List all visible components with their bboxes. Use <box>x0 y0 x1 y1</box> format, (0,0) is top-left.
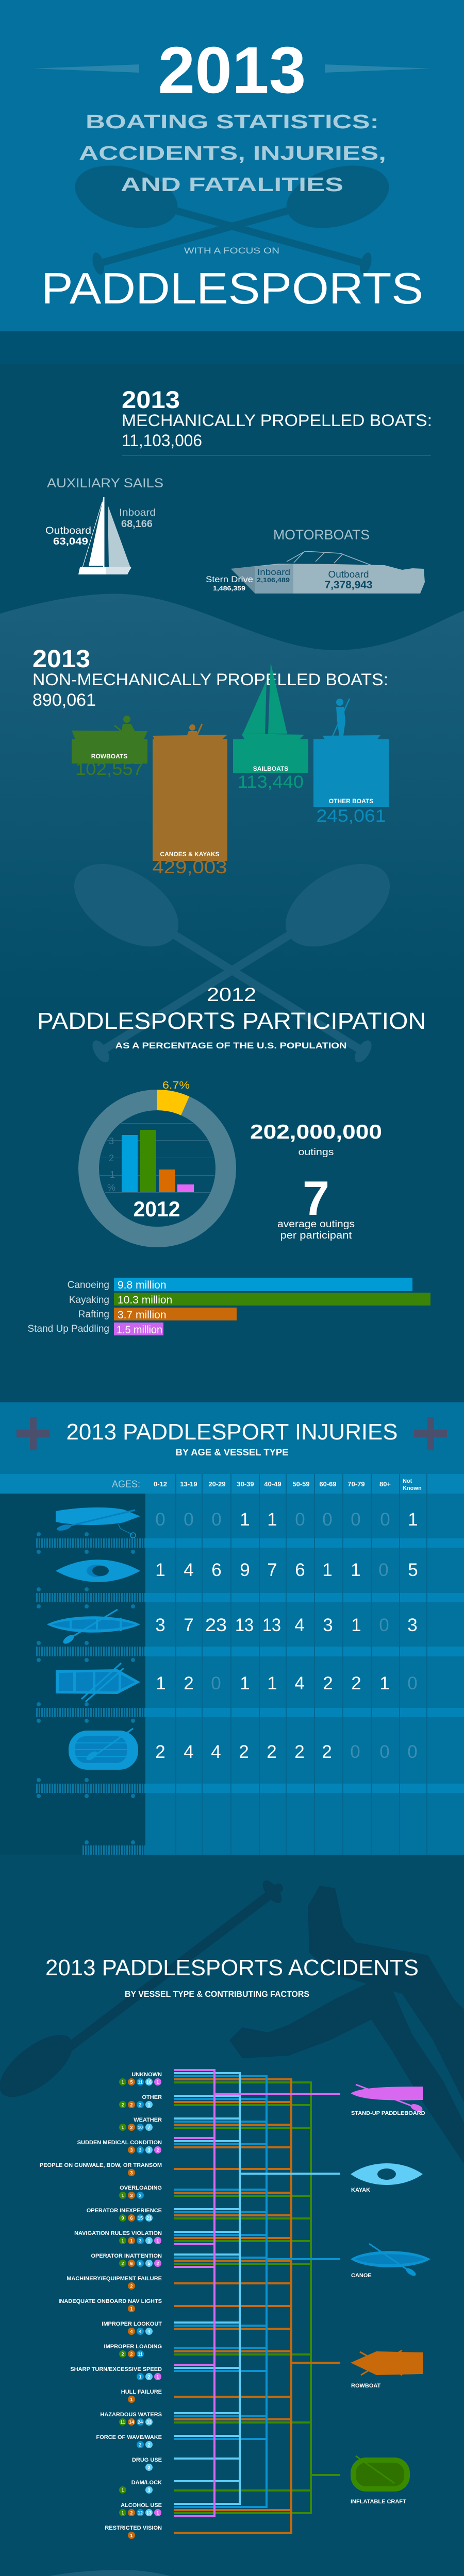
factor: machinery failure: MACHINERY/EQUIPMENT FAILURE <box>67 2276 162 2282</box>
factor: people on gunwale: 3 <box>130 2170 133 2175</box>
factor: overloading: 1 <box>121 2193 124 2198</box>
title: paddlesports: PADDLESPORTS <box>41 264 423 313</box>
vessel icon: inflatable craft: INFLATABLE CRAFT <box>351 2499 406 2505</box>
factor: unknown: 1 <box>156 2079 159 2084</box>
factor: sharp turn: 1 <box>156 2374 159 2379</box>
factor: overloading: 3 <box>130 2193 133 2198</box>
title: boating statistics: AND FATALITIES <box>121 174 343 196</box>
factor: hazardous waters: 33 <box>146 2419 152 2425</box>
heading: 2012 paddlesports participation <box>37 984 426 1050</box>
stat: outings: outings <box>298 1147 334 1157</box>
factor: dam/lock: 1 <box>121 2487 124 2493</box>
factor: overloading: OVERLOADING <box>120 2185 162 2191</box>
icon: stand-up paddleboard <box>56 1507 140 1538</box>
bar chart: participation by activity: Kayaking <box>69 1295 109 1306</box>
factor: hazardous waters: 24 <box>138 2419 143 2425</box>
factor: hazardous waters <box>100 2412 311 2426</box>
factor: navigation rules violation: 3 <box>139 2238 142 2243</box>
heading: 2013 paddlesports accidents: BY VESSEL TYPE & CONTRIBUTING FACTORS <box>125 1989 309 1999</box>
row: kayak injuries: 6 <box>295 1560 305 1580</box>
icon: canoe <box>47 1609 140 1646</box>
table header: ages: Not <box>403 1478 412 1484</box>
row: inflatable injuries: 4 <box>184 1742 194 1762</box>
factor: navigation rules violation: 1 <box>156 2238 159 2243</box>
table header: ages: 0-12 <box>154 1480 167 1488</box>
panel: auxiliary sails: Outboard <box>45 526 91 536</box>
factor: unknown: 5 <box>130 2079 133 2084</box>
vessel icon: kayak <box>351 2163 423 2193</box>
background wave 2 <box>0 2570 464 2576</box>
row: canoe injuries: 23 <box>205 1615 227 1635</box>
row: canoe injuries: 3 <box>407 1615 418 1635</box>
row: rowboat injuries: 2 <box>323 1673 333 1693</box>
chart: participation donut: 3 <box>109 1136 114 1146</box>
row: rowboat injuries: 2 <box>351 1673 361 1693</box>
factor: operator inattention: 8 <box>139 2261 142 2266</box>
factor: inadequate nav lights: INADEQUATE ONBOARD NAV LIGHTS <box>58 2298 162 2304</box>
factor: sharp turn <box>70 2365 267 2380</box>
bar chart: participation by activity: 3.7 million <box>118 1309 167 1321</box>
bar: rowboats: 102,557 <box>75 759 143 779</box>
factor: improper lookout: 4 <box>130 2329 133 2334</box>
bar chart: participation by activity: 9.8 million <box>118 1279 167 1291</box>
factor: operator inattention: 5 <box>147 2261 151 2266</box>
title: boating statistics <box>79 111 386 196</box>
chart: accidents by contributing factor <box>40 2069 340 2539</box>
factor: hazardous waters: 11 <box>120 2419 125 2425</box>
factor: unknown: 1 <box>121 2079 124 2084</box>
factor: operator inexperience: 6 <box>130 2215 133 2221</box>
factor: dam/lock: 3 <box>147 2487 151 2493</box>
factor: improper lookout <box>102 2321 291 2335</box>
row: inflatable injuries: 4 <box>211 1742 221 1762</box>
factor: hull failure: 1 <box>130 2397 133 2402</box>
heading: mechanically propelled boats: 11,103,006 <box>122 431 202 450</box>
factor: sudden medical condition: 3 <box>130 2147 133 2153</box>
factor: drug use: 2 <box>147 2465 151 2470</box>
bars inside donut <box>122 1135 138 1192</box>
row: canoe injuries <box>155 1615 418 1635</box>
factor: sudden medical condition: 2 <box>156 2147 159 2153</box>
heading: non-mechanically propelled boats <box>32 646 388 710</box>
factor: operator inexperience: 15 <box>138 2215 143 2221</box>
factor: overloading <box>119 2185 311 2199</box>
factor: unknown <box>119 2070 311 2086</box>
factor: hazardous waters: 14 <box>129 2419 134 2425</box>
row: rowboat injuries: 1 <box>267 1673 277 1693</box>
factor: overloading: 2 <box>139 2193 142 2198</box>
heading: 2012 paddlesports participation: 2012 <box>207 984 256 1005</box>
factor: drug use <box>132 2457 240 2471</box>
vessel icon: canoe <box>351 2244 430 2279</box>
factor: weather: 1 <box>121 2125 124 2130</box>
factor: drug use: DRUG USE <box>132 2457 162 2463</box>
vessel icon: kayak: KAYAK <box>351 2187 370 2193</box>
background: header <box>0 0 464 331</box>
factor: other: 2 <box>121 2102 124 2107</box>
row: inflatable injuries: 0 <box>379 1742 390 1762</box>
vessel icon: inflatable craft <box>351 2456 410 2505</box>
row: canoe injuries: 4 <box>294 1615 305 1635</box>
row: inflatable injuries: 0 <box>350 1742 360 1762</box>
row: rowboat injuries: 4 <box>294 1673 305 1693</box>
factor: inadequate nav lights: 1 <box>130 2306 133 2311</box>
bar chart: participation by activity: 1.5 million <box>117 1324 162 1336</box>
vessel icon: rowboat <box>351 2350 423 2389</box>
connector verticals <box>214 2069 340 2534</box>
factor: operator inattention <box>91 2253 311 2267</box>
row: rowboat injuries: 0 <box>211 1673 221 1693</box>
background: band <box>0 331 464 364</box>
factor: weather <box>119 2117 311 2131</box>
factor: improper lookout: 4 <box>139 2329 142 2334</box>
row: canoe injuries: 7 <box>184 1615 194 1635</box>
row: inflatable injuries: 2 <box>267 1742 277 1762</box>
row: rowboat injuries: 0 <box>407 1673 418 1693</box>
factor: operator inexperience: OPERATOR INEXPERIENCE <box>87 2208 162 2214</box>
row: SUP injuries: 0 <box>211 1510 222 1530</box>
row: inflatable injuries <box>155 1742 418 1762</box>
row: canoe injuries: 13 <box>262 1615 281 1635</box>
row: rowboat injuries <box>156 1673 418 1693</box>
vessel icon: stand-up paddleboard: STAND-UP PADDLEBOARD <box>351 2110 425 2116</box>
icon: inflatable raft <box>69 1728 138 1770</box>
table header: ages: 60-69 <box>319 1480 337 1488</box>
factor: hull failure <box>121 2389 291 2403</box>
row: SUP injuries: 1 <box>267 1510 277 1530</box>
factor: restricted vision: RESTRICTED VISION <box>105 2525 162 2531</box>
factor: weather: 7 <box>147 2125 151 2130</box>
factor: alcohol use: 13 <box>146 2510 152 2515</box>
factor: force of wave <box>96 2434 267 2448</box>
title: boating statistics: ACCIDENTS, INJURIES, <box>79 143 386 164</box>
factor: operator inexperience: 9 <box>121 2215 124 2221</box>
factor: sharp turn: 2 <box>147 2374 151 2379</box>
stat: outings <box>250 1121 382 1157</box>
row: SUP injuries: 0 <box>155 1510 165 1530</box>
panel: motorboats: 7,378,943 <box>325 579 372 591</box>
factor: navigation rules violation: NAVIGATION RULES VIOLATION <box>74 2230 162 2236</box>
panel: motorboats: Outboard <box>328 569 369 580</box>
row: kayak injuries: 6 <box>211 1560 222 1580</box>
row: rowboat injuries: 1 <box>240 1673 250 1693</box>
row: inflatable injuries: 2 <box>322 1742 332 1762</box>
row: canoe injuries: 3 <box>323 1615 333 1635</box>
icon: crossed paddles header <box>68 155 396 293</box>
bar: other boats <box>313 699 389 826</box>
factor: improper loading: 2 <box>121 2351 124 2357</box>
factor: people on gunwale: PEOPLE ON GUNWALE, BOW, OR TRANSOM <box>40 2162 162 2168</box>
icon: rowboat <box>56 1663 140 1702</box>
panel: motorboats: Stern Drive <box>206 574 253 584</box>
icon: plus signs <box>16 1417 447 1450</box>
bar chart: participation by activity: Rafting <box>78 1309 109 1320</box>
stat: average outings: 7 <box>303 1171 329 1225</box>
factor: navigation rules violation: 1 <box>121 2238 124 2243</box>
row: kayak injuries <box>155 1560 418 1580</box>
bar: rowboats <box>72 716 147 779</box>
stat: average outings: average outings <box>277 1219 355 1230</box>
factor: other: 2 <box>139 2102 142 2107</box>
panel: motorboats: 1,486,359 <box>213 585 245 592</box>
bar chart: participation by activity: Stand Up Paddling <box>28 1324 109 1334</box>
heading: mechanically propelled boats <box>122 386 432 450</box>
bar chart: participation by activity <box>28 1278 430 1336</box>
heading: 2013 paddlesports accidents <box>45 1955 419 1999</box>
row: inflatable injuries: 2 <box>239 1742 249 1762</box>
factor: other: 2 <box>130 2102 133 2107</box>
panel: motorboats: MOTORBOATS <box>273 527 370 543</box>
vessel icon: rowboat: ROWBOAT <box>351 2383 381 2389</box>
table header: ages: AGES: <box>112 1479 140 1490</box>
factor: restricted vision: 1 <box>130 2533 133 2538</box>
factor: people on gunwale <box>40 2162 291 2176</box>
row: kayak injuries: 7 <box>267 1560 277 1580</box>
panel: auxiliary sails: 63,049 <box>53 536 88 547</box>
row: rowboat injuries: 1 <box>379 1673 390 1693</box>
factor: sudden medical condition: 3 <box>139 2147 142 2153</box>
factor: sudden medical condition: 3 <box>147 2147 151 2153</box>
factor: alcohol use: ALCOHOL USE <box>121 2502 162 2509</box>
bar: sailboats: 113,440 <box>238 772 304 792</box>
factor: dam/lock <box>119 2480 311 2494</box>
bar: canoes & kayaks: CANOES & KAYAKS <box>160 851 220 858</box>
factor: other: 1 <box>147 2102 151 2107</box>
table header: ages <box>112 1478 422 1492</box>
row: inflatable injuries: 2 <box>155 1742 165 1762</box>
title: 2013: 2013 <box>158 33 306 107</box>
row: canoe injuries: 13 <box>235 1615 254 1635</box>
row: kayak injuries: 1 <box>322 1560 333 1580</box>
row: canoe injuries: 1 <box>351 1615 361 1635</box>
row: SUP injuries: 0 <box>380 1510 390 1530</box>
factor: hazardous waters: HAZARDOUS WATERS <box>100 2412 162 2418</box>
icon: sailboat <box>78 497 131 574</box>
bar: other boats: OTHER BOATS <box>329 798 373 805</box>
background: boats section <box>0 364 464 1402</box>
factor: weather: WEATHER <box>134 2117 162 2123</box>
factor: alcohol use: 1 <box>156 2510 159 2515</box>
panel: motorboats: Inboard <box>257 567 290 577</box>
factor: unknown: 11 <box>138 2079 143 2084</box>
factor: improper lookout: 4 <box>147 2329 151 2334</box>
factor: improper lookout: IMPROPER LOOKOUT <box>102 2321 162 2327</box>
factor: unknown: UNKNOWN <box>131 2072 162 2078</box>
row: kayak injuries: 4 <box>184 1560 194 1580</box>
factor: machinery failure: 2 <box>130 2283 133 2289</box>
bar chart: participation by activity: 10.3 million <box>118 1294 172 1306</box>
row: kayak injuries: 1 <box>351 1560 361 1580</box>
factor: operator inexperience <box>87 2208 311 2222</box>
row: canoe injuries: 0 <box>379 1615 389 1635</box>
bar: canoes & kayaks <box>153 724 227 877</box>
heading: 2012 paddlesports participation: AS A PERCENTAGE OF THE U.S. POPULATION <box>115 1041 346 1050</box>
factor: alcohol use: 12 <box>138 2510 143 2515</box>
table header: ages: 20-29 <box>208 1480 226 1488</box>
bar: sailboats: SAILBOATS <box>253 765 288 772</box>
factor: navigation rules violation: 1 <box>130 2238 133 2243</box>
table header: ages: 40-49 <box>264 1480 281 1488</box>
row: inflatable injuries: 0 <box>407 1742 418 1762</box>
factor: alcohol use: 2 <box>130 2510 133 2515</box>
factor: navigation rules violation <box>74 2230 311 2244</box>
heading: 2013 paddlesport injuries: BY AGE & VESSEL TYPE <box>175 1447 289 1458</box>
stat: average outings: per participant <box>280 1230 352 1241</box>
background wave 1 <box>0 594 464 1005</box>
vessel icon: canoe: CANOE <box>351 2273 372 2279</box>
factor: sharp turn: SHARP TURN/EXCESSIVE SPEED <box>70 2366 162 2372</box>
bar: sailboats <box>233 663 308 792</box>
row: SUP injuries: 0 <box>322 1510 333 1530</box>
factor: dam/lock: DAM/LOCK <box>131 2480 162 2486</box>
heading: non-mechanically propelled boats: 2013 <box>32 646 90 673</box>
heading: mechanically propelled boats: MECHANICALLY PROPELLED BOATS: <box>122 411 432 430</box>
row: canoe injuries: 3 <box>155 1615 165 1635</box>
factor: machinery failure <box>67 2276 291 2290</box>
bar: other boats: 245,061 <box>317 806 386 826</box>
vessel icon: stand-up paddleboard <box>351 2084 425 2116</box>
heading: mechanically propelled boats: 2013 <box>122 386 180 413</box>
factor: improper loading <box>104 2344 311 2358</box>
factor: operator inattention: OPERATOR INATTENTION <box>91 2253 162 2259</box>
row: rowboat injuries: 1 <box>156 1673 166 1693</box>
factor: navigation rules violation: 1 <box>147 2238 151 2243</box>
subtitle: with a focus on: WITH A FOCUS ON <box>184 246 279 256</box>
panel: auxiliary sails: Inboard <box>119 507 156 518</box>
chart: participation donut: 6.7% <box>162 1080 190 1091</box>
heading: 2013 paddlesport injuries <box>66 1419 398 1458</box>
table header: ages: 13-19 <box>180 1480 197 1488</box>
factor: restricted vision <box>105 2525 291 2539</box>
row: SUP injuries: 0 <box>351 1510 361 1530</box>
row: SUP injuries: 1 <box>240 1510 250 1530</box>
factor: weather: 2 <box>130 2125 133 2130</box>
panel: auxiliary sails: 68,166 <box>121 519 153 530</box>
factor: alcohol use <box>119 2502 311 2516</box>
row: kayak injuries: 1 <box>155 1560 165 1580</box>
factor: force of wave: 2 <box>147 2442 151 2447</box>
row: kayak injuries: 9 <box>240 1560 250 1580</box>
illustration: falling paddler silhouette <box>0 1877 464 2164</box>
heading: non-mechanically propelled boats: NON-MECHANICALLY PROPELLED BOATS: <box>32 670 388 689</box>
bar chart: non-mechanical boats <box>72 663 389 877</box>
heading: non-mechanically propelled boats: 890,061 <box>32 690 96 710</box>
row: SUP injuries: 0 <box>295 1510 305 1530</box>
factor: operator inattention: 2 <box>121 2261 124 2266</box>
table header: ages: Known <box>403 1485 422 1492</box>
bar chart: participation by activity: Canoeing <box>68 1280 109 1291</box>
row: SUP injuries <box>155 1510 418 1530</box>
table: injuries by age <box>0 1474 464 1855</box>
factor: operator inattention: 6 <box>130 2261 133 2266</box>
bar: rowboats: ROWBOATS <box>91 753 127 760</box>
heading: 2013 paddlesport injuries: 2013 PADDLESPORT INJURIES <box>66 1419 398 1445</box>
factor: force of wave: FORCE OF WAVE/WAKE <box>96 2434 162 2441</box>
factor: operator inexperience: 21 <box>146 2215 152 2221</box>
icon: crossed paddles background <box>60 847 404 1083</box>
factor: force of wave: 2 <box>139 2442 142 2447</box>
factor: other <box>119 2094 311 2108</box>
heading: 2013 paddlesports accidents: 2013 PADDLESPORTS ACCIDENTS <box>45 1955 419 1980</box>
heading: 2012 paddlesports participation: PADDLESPORTS PARTICIPATION <box>37 1008 426 1034</box>
title: boating statistics: BOATING STATISTICS: <box>86 111 379 133</box>
icon: motorboat <box>231 551 425 594</box>
row: kayak injuries: 0 <box>378 1560 389 1580</box>
factor: hull failure: HULL FAILURE <box>121 2389 162 2395</box>
factor: sharp turn: 1 <box>139 2374 142 2379</box>
factor: inadequate nav lights <box>58 2298 291 2312</box>
factor: sudden medical condition <box>77 2138 291 2154</box>
table header: ages: 50-59 <box>292 1480 310 1488</box>
chart: participation donut: 2012 <box>133 1197 180 1221</box>
factor: alcohol use: 1 <box>121 2510 124 2515</box>
icon: kayak <box>56 1560 140 1582</box>
row: rowboat injuries: 2 <box>184 1673 194 1693</box>
decorative lines beside year <box>34 64 430 73</box>
chart: participation donut: % <box>107 1182 115 1193</box>
chart: participation donut: 2 <box>109 1153 114 1163</box>
factor: other: OTHER <box>142 2094 162 2100</box>
row: inflatable injuries: 2 <box>294 1742 305 1762</box>
row: SUP injuries: 0 <box>184 1510 194 1530</box>
table header: ages: 80+ <box>379 1480 391 1488</box>
factor: improper loading: 2 <box>130 2351 133 2357</box>
chart: participation donut: 1 <box>110 1170 115 1180</box>
row: kayak injuries: 5 <box>408 1560 418 1580</box>
panel: injuries background <box>0 1402 464 1855</box>
factor: unknown: 16 <box>146 2079 152 2084</box>
panel: motorboats: 2,106,489 <box>257 577 290 584</box>
factor: improper loading: IMPROPER LOADING <box>104 2344 162 2350</box>
background: accidents & fatalities <box>0 1855 464 2576</box>
chart: participation donut <box>89 1080 226 1237</box>
factor: operator inattention: 2 <box>156 2261 159 2266</box>
factor: improper loading: 11 <box>138 2351 143 2357</box>
factor: sudden medical condition: SUDDEN MEDICAL CONDITION <box>77 2140 162 2146</box>
panel: auxiliary sails: AUXILIARY SAILS <box>47 476 163 490</box>
factor: weather: 10 <box>138 2125 143 2130</box>
panel: motorboats <box>206 527 425 594</box>
stat: outings: 202,000,000 <box>250 1121 382 1143</box>
bar: canoes & kayaks: 429,003 <box>153 857 227 877</box>
row: SUP injuries: 1 <box>408 1510 418 1530</box>
stat: average outings <box>277 1171 355 1241</box>
table header: ages: 30-39 <box>237 1480 254 1488</box>
panel: auxiliary sails <box>45 476 163 574</box>
table header: ages: 70-79 <box>347 1480 365 1488</box>
